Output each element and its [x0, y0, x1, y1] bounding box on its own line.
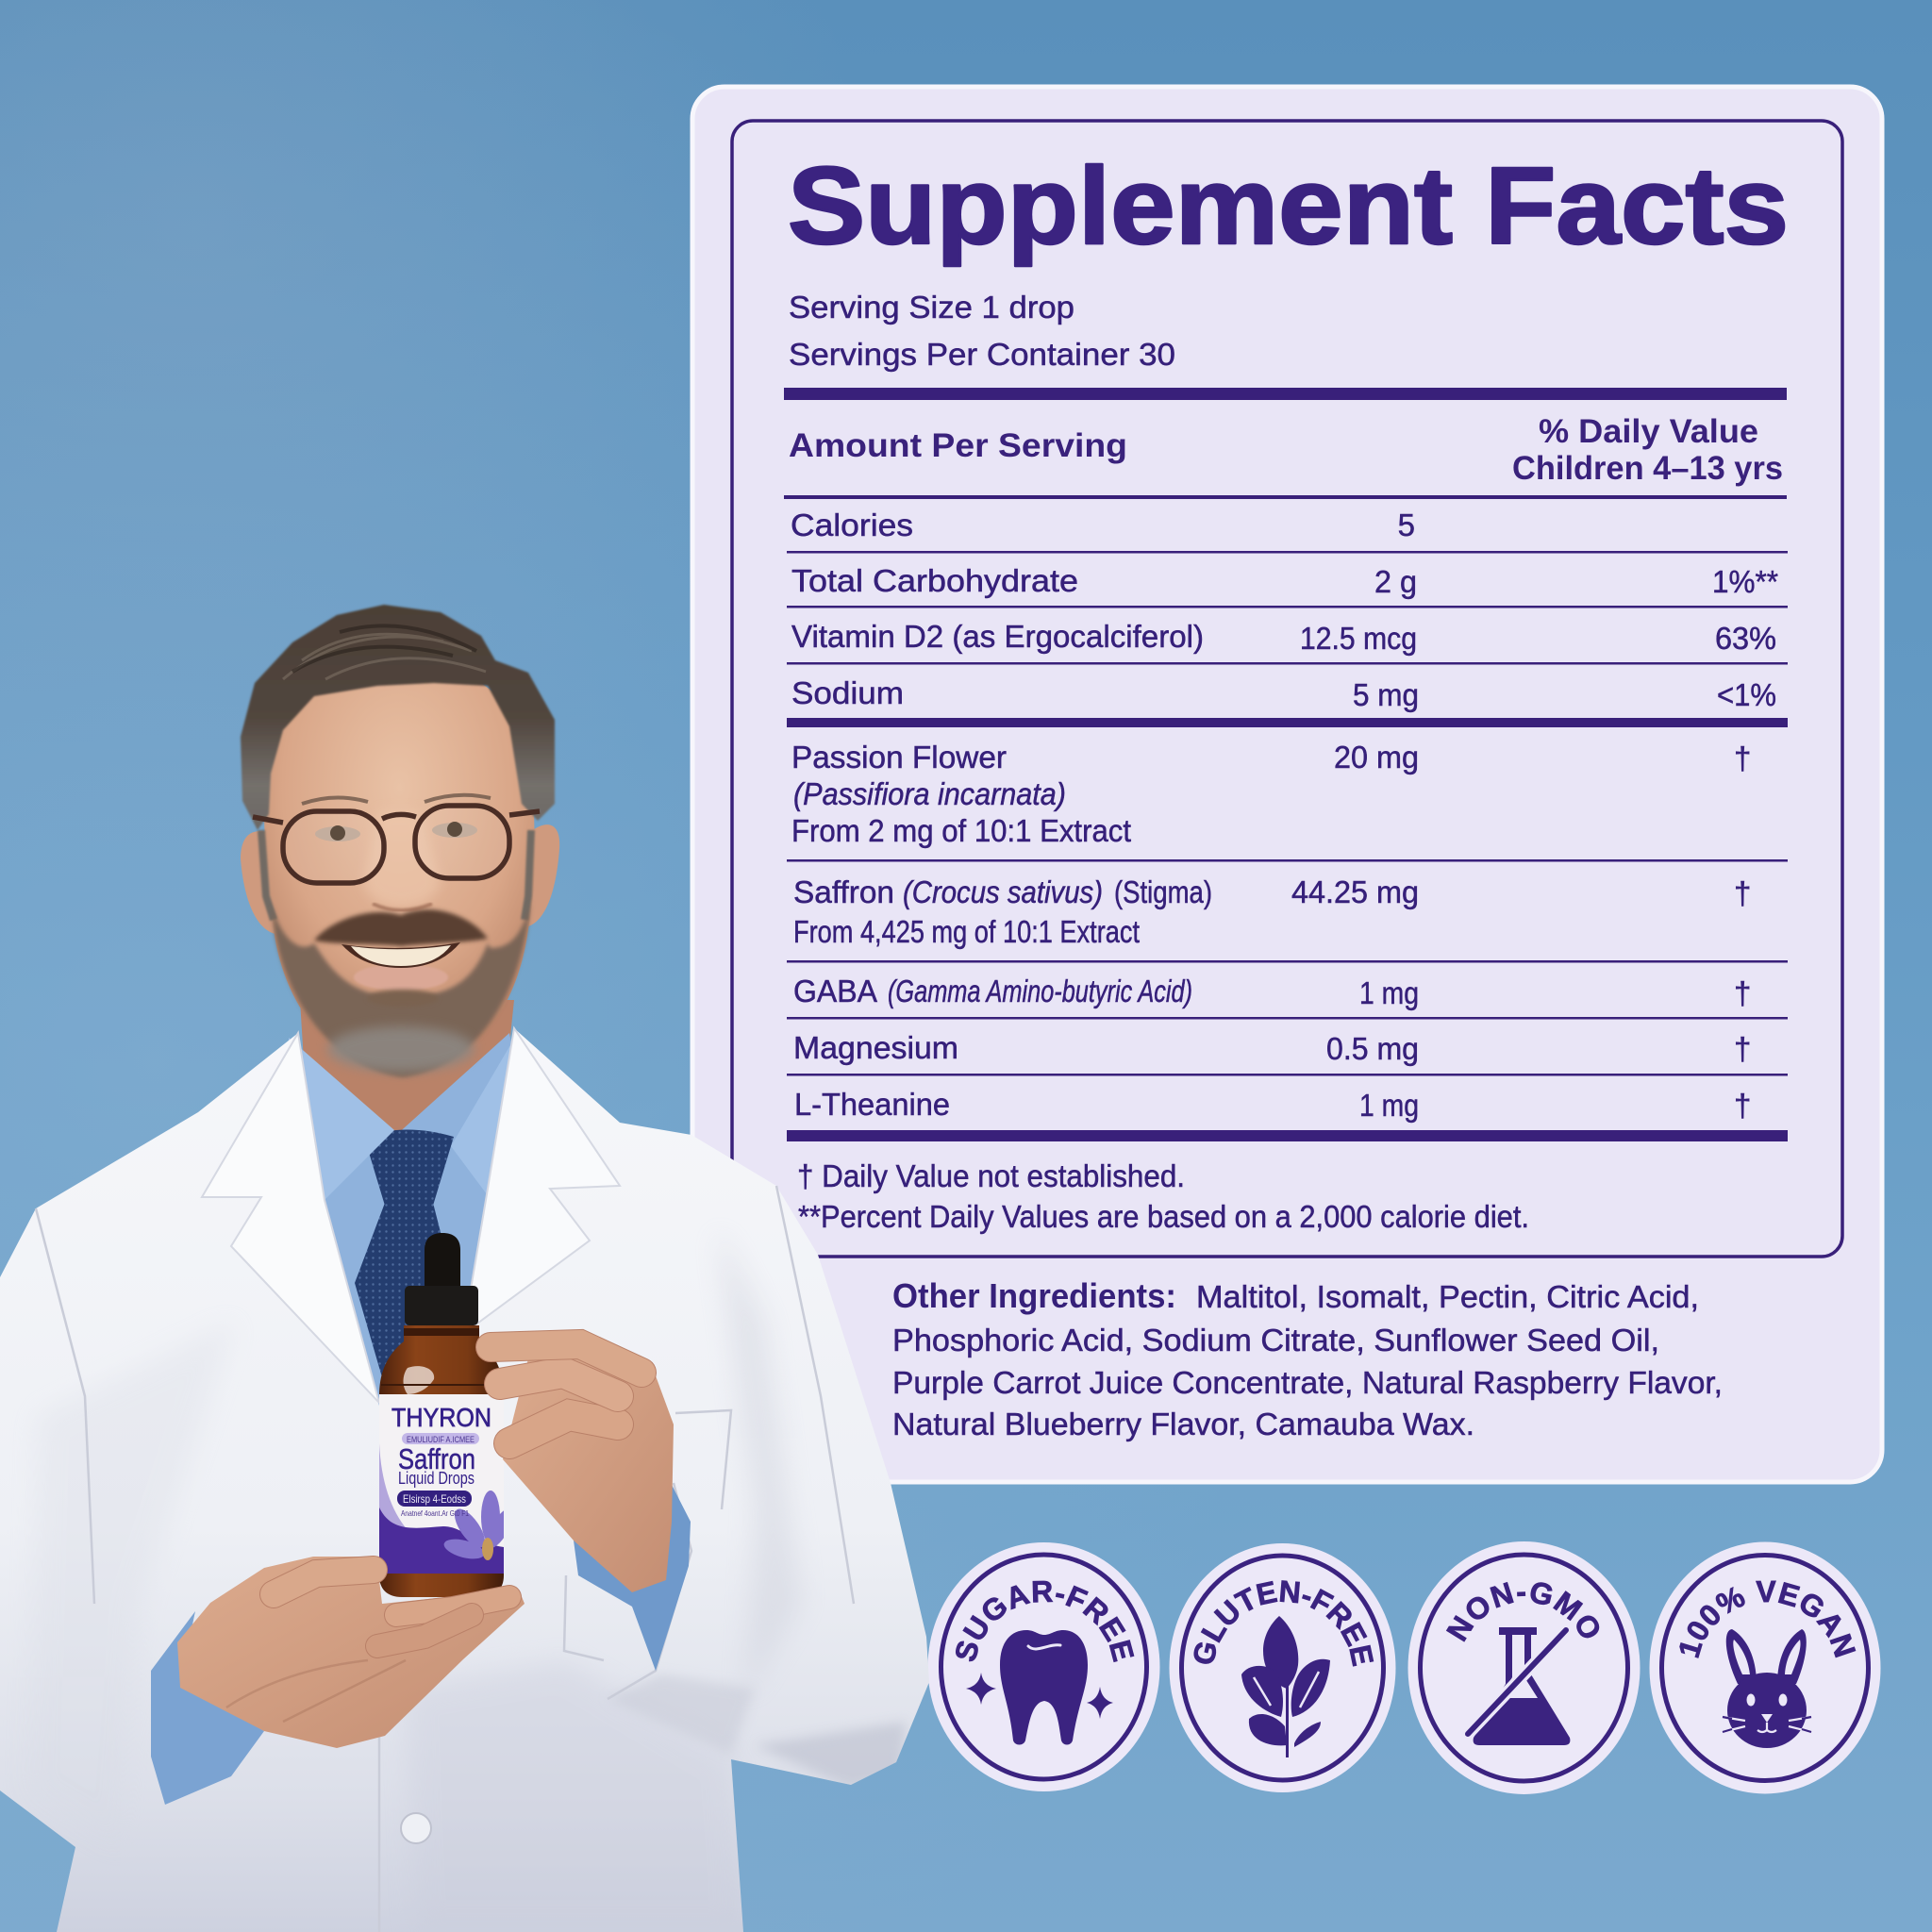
column headers: Children 4–13 yrs — [1512, 450, 1783, 487]
table rows: 1%** — [1712, 564, 1778, 599]
mouth — [341, 942, 460, 968]
badge: gluten-free — [1170, 1543, 1396, 1792]
label text: THYRON — [391, 1403, 491, 1432]
coat seams — [36, 1186, 854, 1932]
upper hand — [491, 1344, 674, 1592]
table rows: † — [1734, 1088, 1751, 1123]
serving info: Serving Size 1 drop — [789, 290, 1074, 325]
table rows: 1 mg — [1359, 975, 1419, 1010]
badge text: SUGAR-FREE — [955, 1581, 1134, 1662]
table rows: Total Carbohydrate — [791, 563, 1078, 598]
table rows: 0.5 mg — [1326, 1031, 1419, 1066]
neck — [300, 1000, 514, 1137]
other ingredients: Other Ingredients: — [892, 1276, 1176, 1315]
left shirt cuff — [151, 1611, 264, 1805]
table rows: L-Theanine — [794, 1087, 950, 1122]
other ingredients: Purple Carrot Juice Concentrate, Natural Raspberry Flavor, — [892, 1365, 1723, 1400]
shirt — [288, 1033, 525, 1406]
dropper — [425, 1233, 460, 1286]
table rows: 20 mg — [1334, 740, 1419, 774]
glasses — [253, 806, 540, 883]
table rows: 5 mg — [1353, 677, 1419, 712]
nose — [363, 811, 441, 910]
beard — [272, 901, 531, 1077]
table rows: (Gamma Amino-butyric Acid) — [888, 974, 1192, 1008]
dropper bottle: Liquid Drops — [398, 1469, 475, 1488]
table rows: † — [1734, 741, 1751, 775]
table rows: (Passifiora incarnata) — [793, 776, 1066, 811]
column headers: % Daily Value — [1539, 413, 1758, 450]
serving info: Servings Per Container 30 — [789, 337, 1175, 372]
lower hand — [177, 1557, 525, 1748]
icon: crossed flask — [1468, 1627, 1570, 1745]
table rows: 5 — [1398, 508, 1415, 542]
face — [264, 663, 535, 1077]
dropper bottle: Saffron — [398, 1442, 475, 1475]
table rows: † — [1734, 975, 1751, 1010]
badge text: 100% VEGAN — [1679, 1581, 1857, 1658]
footnotes: **Percent Daily Values are based on a 2,000 calorie diet. — [798, 1199, 1529, 1234]
tie — [355, 1130, 463, 1396]
icon: sparkles — [966, 1673, 1113, 1719]
table rows: From 2 mg of 10:1 Extract — [791, 813, 1131, 848]
column headers: Amount Per Serving — [789, 427, 1127, 464]
inner facts box — [732, 121, 1842, 1257]
table rows: 2 g — [1374, 564, 1417, 599]
dropper bottle: Anatnef 4oant.Ar Gt0 F1 — [401, 1509, 469, 1518]
badge text: NON-GMO — [1445, 1581, 1600, 1642]
shirt collars — [286, 1034, 524, 1200]
lab coat — [0, 1028, 929, 1932]
label — [379, 1394, 504, 1547]
table rows: Sodium — [791, 675, 904, 710]
table rows: Vitamin D2 (as Ergocalciferol) — [791, 619, 1204, 654]
saffron flower — [443, 1491, 504, 1560]
dropper bottle: EMULIUDIF A.ICMEE — [407, 1435, 475, 1444]
table rows: 44.25 mg — [1291, 874, 1419, 909]
badge: non-gmo — [1407, 1541, 1640, 1794]
badge: vegan — [1649, 1541, 1881, 1794]
table rows: † — [1734, 875, 1751, 910]
table rows: From 4,425 mg of 10:1 Extract — [793, 914, 1140, 949]
lower thumb and fingers — [274, 1570, 509, 1646]
table rows: † — [1734, 1031, 1751, 1066]
right shirt cuff — [574, 1481, 691, 1671]
footnotes: † Daily Value not established. — [797, 1158, 1185, 1193]
table rows — [787, 508, 1788, 1141]
other ingredients: Phosphoric Acid, Sodium Citrate, Sunflower Seed Oil, — [892, 1323, 1659, 1357]
other ingredients: Maltitol, Isomalt, Pectin, Citric Acid, — [1196, 1279, 1699, 1314]
icon: rabbit — [1723, 1629, 1811, 1748]
ears — [241, 824, 559, 934]
footnotes — [797, 1158, 1529, 1234]
dropper bottle: Elsirsp 4-Eodss — [403, 1492, 466, 1506]
table rows: Magnesium — [793, 1030, 958, 1065]
eyes — [302, 795, 491, 841]
other ingredients — [892, 1276, 1723, 1441]
title: Supplement Facts — [788, 144, 1789, 267]
icon: tooth — [1000, 1630, 1088, 1745]
table rows: Calories — [791, 508, 913, 542]
coat button — [401, 1813, 431, 1843]
bottle glass — [379, 1325, 504, 1597]
panel: supplement facts card — [692, 87, 1882, 1482]
dropper bottle — [379, 1233, 504, 1597]
hair — [241, 605, 555, 920]
table rows: 12.5 mcg — [1300, 621, 1417, 656]
table rows: Passion Flower — [791, 740, 1007, 774]
table rows: (Crocus sativus) — [903, 874, 1103, 909]
table rows: GABA — [793, 974, 877, 1008]
column headers — [784, 388, 1787, 499]
doctor figure — [0, 605, 929, 1932]
table rows: 63% — [1715, 621, 1776, 656]
serving info — [789, 290, 1175, 372]
table rows: Saffron — [793, 874, 894, 909]
table rows: 1 mg — [1359, 1088, 1419, 1123]
table rows: (Stigma) — [1114, 874, 1212, 909]
other ingredients: Natural Blueberry Flavor, Camauba Wax. — [892, 1407, 1474, 1441]
badge: sugar-free — [928, 1542, 1160, 1791]
badge text: GLUTEN-FREE — [1193, 1580, 1374, 1667]
lapels — [202, 1033, 379, 1403]
table rows: <1% — [1717, 677, 1776, 712]
icon: leaves — [1241, 1616, 1330, 1757]
